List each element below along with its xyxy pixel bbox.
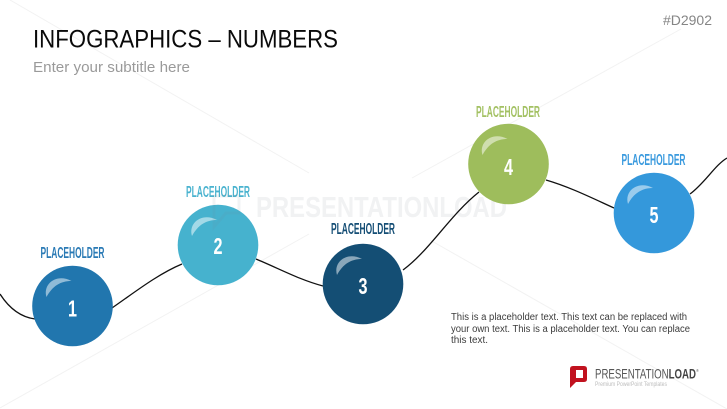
logo tagline: Premium PowerPoint Templates (595, 382, 667, 388)
step 1 bubble: 1 (68, 296, 77, 322)
subtitle: Enter your subtitle here (33, 59, 190, 76)
step 3 (323, 221, 403, 324)
step 3 label: PLACEHOLDER (331, 221, 395, 238)
step 4 (468, 104, 549, 204)
placeholder text block: your own text. This is a placeholder text. You can replace (451, 324, 690, 335)
placeholder text block: This is a placeholder text. This text can be replaced with (451, 312, 687, 323)
step 3 bubble: 3 (358, 273, 368, 299)
step 2 (178, 184, 258, 285)
step 1 label: PLACEHOLDER (40, 245, 104, 262)
step 5 bubble: 5 (650, 202, 659, 228)
placeholder text block: this text. (451, 335, 488, 346)
title: INFOGRAPHICS – NUMBERS (33, 26, 338, 54)
logo icon (570, 366, 587, 388)
connecting curve (0, 158, 727, 319)
step 5 (614, 152, 694, 253)
logo: PresentationLoad (570, 366, 699, 388)
logo registered mark: ® (696, 368, 699, 373)
step 1 (32, 245, 113, 346)
step 2 label: PLACEHOLDER (186, 184, 250, 201)
watermark wordmark: PRESENTATIONLOAD (256, 192, 507, 224)
logo wordmark: PRESENTATIONLOAD (595, 366, 696, 382)
step 2 bubble: 2 (214, 233, 222, 259)
watermark icon (214, 196, 239, 227)
step 4 bubble: 4 (504, 154, 513, 180)
step 4 label: PLACEHOLDER (476, 104, 540, 121)
placeholder text block (451, 312, 690, 346)
slide code: #D2902 (663, 13, 712, 28)
